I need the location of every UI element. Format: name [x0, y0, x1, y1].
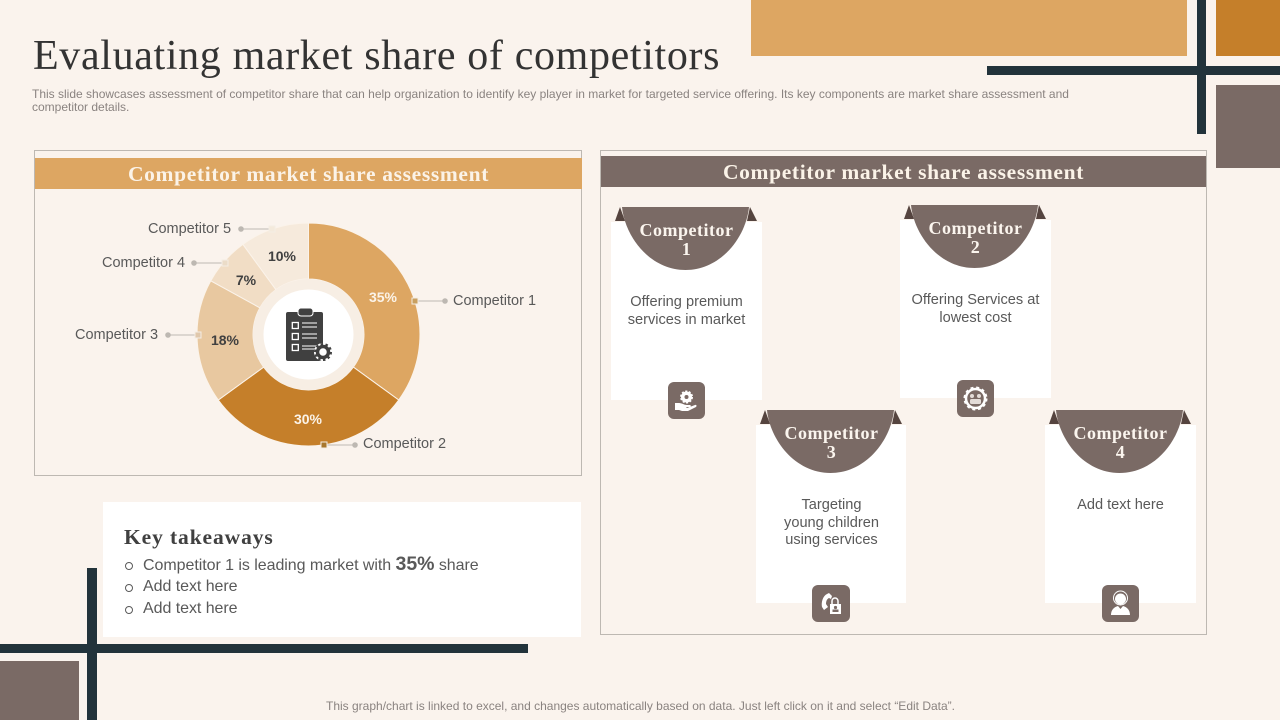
key takeaways heading: Key takeaways: [124, 525, 274, 549]
card text: lowest cost: [939, 310, 1012, 326]
card text: Offering Services at: [912, 292, 1039, 308]
value labels: 7%: [236, 272, 257, 288]
donut inner ring: [253, 279, 364, 390]
card: competitor 2: [900, 220, 1051, 398]
label: competitor 4: Competitor 4: [102, 255, 185, 271]
donut chart: [165, 224, 448, 448]
card text: Targeting: [801, 497, 862, 513]
decorative bar: top vertical: [1197, 0, 1206, 134]
decorative block: top tan: [751, 0, 1187, 56]
ribbon title: Competitor: [1074, 423, 1167, 443]
ribbon: [904, 205, 1046, 268]
ribbon title: 2: [971, 236, 980, 256]
ribbon title: 3: [827, 442, 836, 462]
bullet marker 1: [125, 562, 133, 570]
icon tile: hand with gear: [668, 382, 705, 419]
card: competitor 1: [611, 222, 762, 400]
donut inner white circle: [264, 290, 354, 380]
bullet marker 3: [125, 606, 133, 614]
decorative block: right brown: [1216, 85, 1280, 168]
decorative block: top orange: [1216, 0, 1280, 56]
card text: Add text here: [1077, 497, 1164, 513]
leader markers: [195, 226, 418, 448]
card text: young children: [784, 515, 879, 531]
slice: competitor 1, 35%: [308, 223, 420, 400]
ribbon title: Competitor: [784, 423, 878, 443]
description text: This slide showcases assessment of competitor share that can help organization to identify key player in market for targeted service offering. Its key components are market share assessment and: [32, 87, 1069, 101]
card text: [912, 292, 1040, 326]
decorative bar: top horizontal: [987, 66, 1280, 75]
ribbon: [760, 410, 902, 473]
description text: competitor details.: [32, 100, 129, 114]
panel heading: competitor details: Competitor market share assessment: [723, 160, 1084, 184]
ribbon title: [928, 218, 1022, 256]
decorative block: bottom brown: [0, 661, 79, 720]
ribbon title: [640, 220, 733, 258]
value labels: [211, 248, 398, 427]
label: competitor 1: Competitor 1: [453, 293, 536, 309]
panel heading: chart: [35, 158, 582, 189]
description text: [32, 87, 1069, 114]
card: competitor 3: [756, 425, 906, 603]
label: competitor 3: Competitor 3: [75, 327, 158, 343]
value labels: 18%: [211, 332, 240, 348]
card: competitor 4: [1045, 425, 1196, 603]
icon: clipboard with gear: [286, 308, 332, 361]
slice: competitor 5, 10%: [243, 223, 308, 290]
ribbon title: 4: [1116, 442, 1125, 462]
icon tile: person: [1102, 585, 1139, 622]
value labels: 30%: [294, 411, 323, 427]
value labels: 10%: [268, 248, 297, 264]
footnote: This graph/chart is linked to excel, and changes automatically based on data. Just left click on it and select “Edit Data”.: [326, 699, 955, 713]
title: Evaluating market share of competitors: [33, 33, 720, 79]
takeaway 3: Add text here: [143, 600, 238, 617]
ribbon title: Competitor: [928, 218, 1022, 238]
ribbon: [615, 207, 757, 270]
card text: services in market: [628, 312, 745, 328]
panel heading: competitor details: [601, 156, 1206, 187]
panel heading: chart: Competitor market share assessment: [128, 162, 489, 186]
decorative bar: bottom horizontal: [0, 644, 528, 653]
ribbon title: Competitor: [640, 220, 733, 240]
label: competitor 5: Competitor 5: [148, 221, 231, 237]
slice: competitor 3, 18%: [197, 281, 264, 400]
ribbon title: [784, 423, 878, 462]
bullet marker 2: [125, 584, 133, 592]
icon tile: gear with people: [957, 380, 994, 417]
panel: key takeaways: [103, 502, 581, 637]
slice: competitor 2, 30%: [218, 367, 399, 446]
ribbon: [1049, 410, 1191, 473]
panel: competitor details: [600, 150, 1207, 635]
card text: [628, 294, 746, 328]
leader lines: [166, 227, 447, 447]
panel: market share chart: [34, 150, 582, 476]
takeaway 2: Add text here: [143, 578, 238, 595]
card text: using services: [785, 532, 878, 548]
takeaway 1: Competitor 1 is leading market with 35% share: [143, 553, 479, 575]
icon tile: phone with contact: [812, 585, 850, 622]
ribbon title: [1074, 423, 1167, 462]
card text: Offering premium: [630, 294, 743, 310]
card text: [784, 497, 879, 548]
value labels: 35%: [369, 289, 398, 305]
decorative bar: bottom vertical: [87, 568, 97, 720]
label: competitor 2: Competitor 2: [363, 436, 446, 452]
ribbon title: 1: [682, 238, 691, 258]
slice: competitor 4, 7%: [211, 244, 276, 308]
